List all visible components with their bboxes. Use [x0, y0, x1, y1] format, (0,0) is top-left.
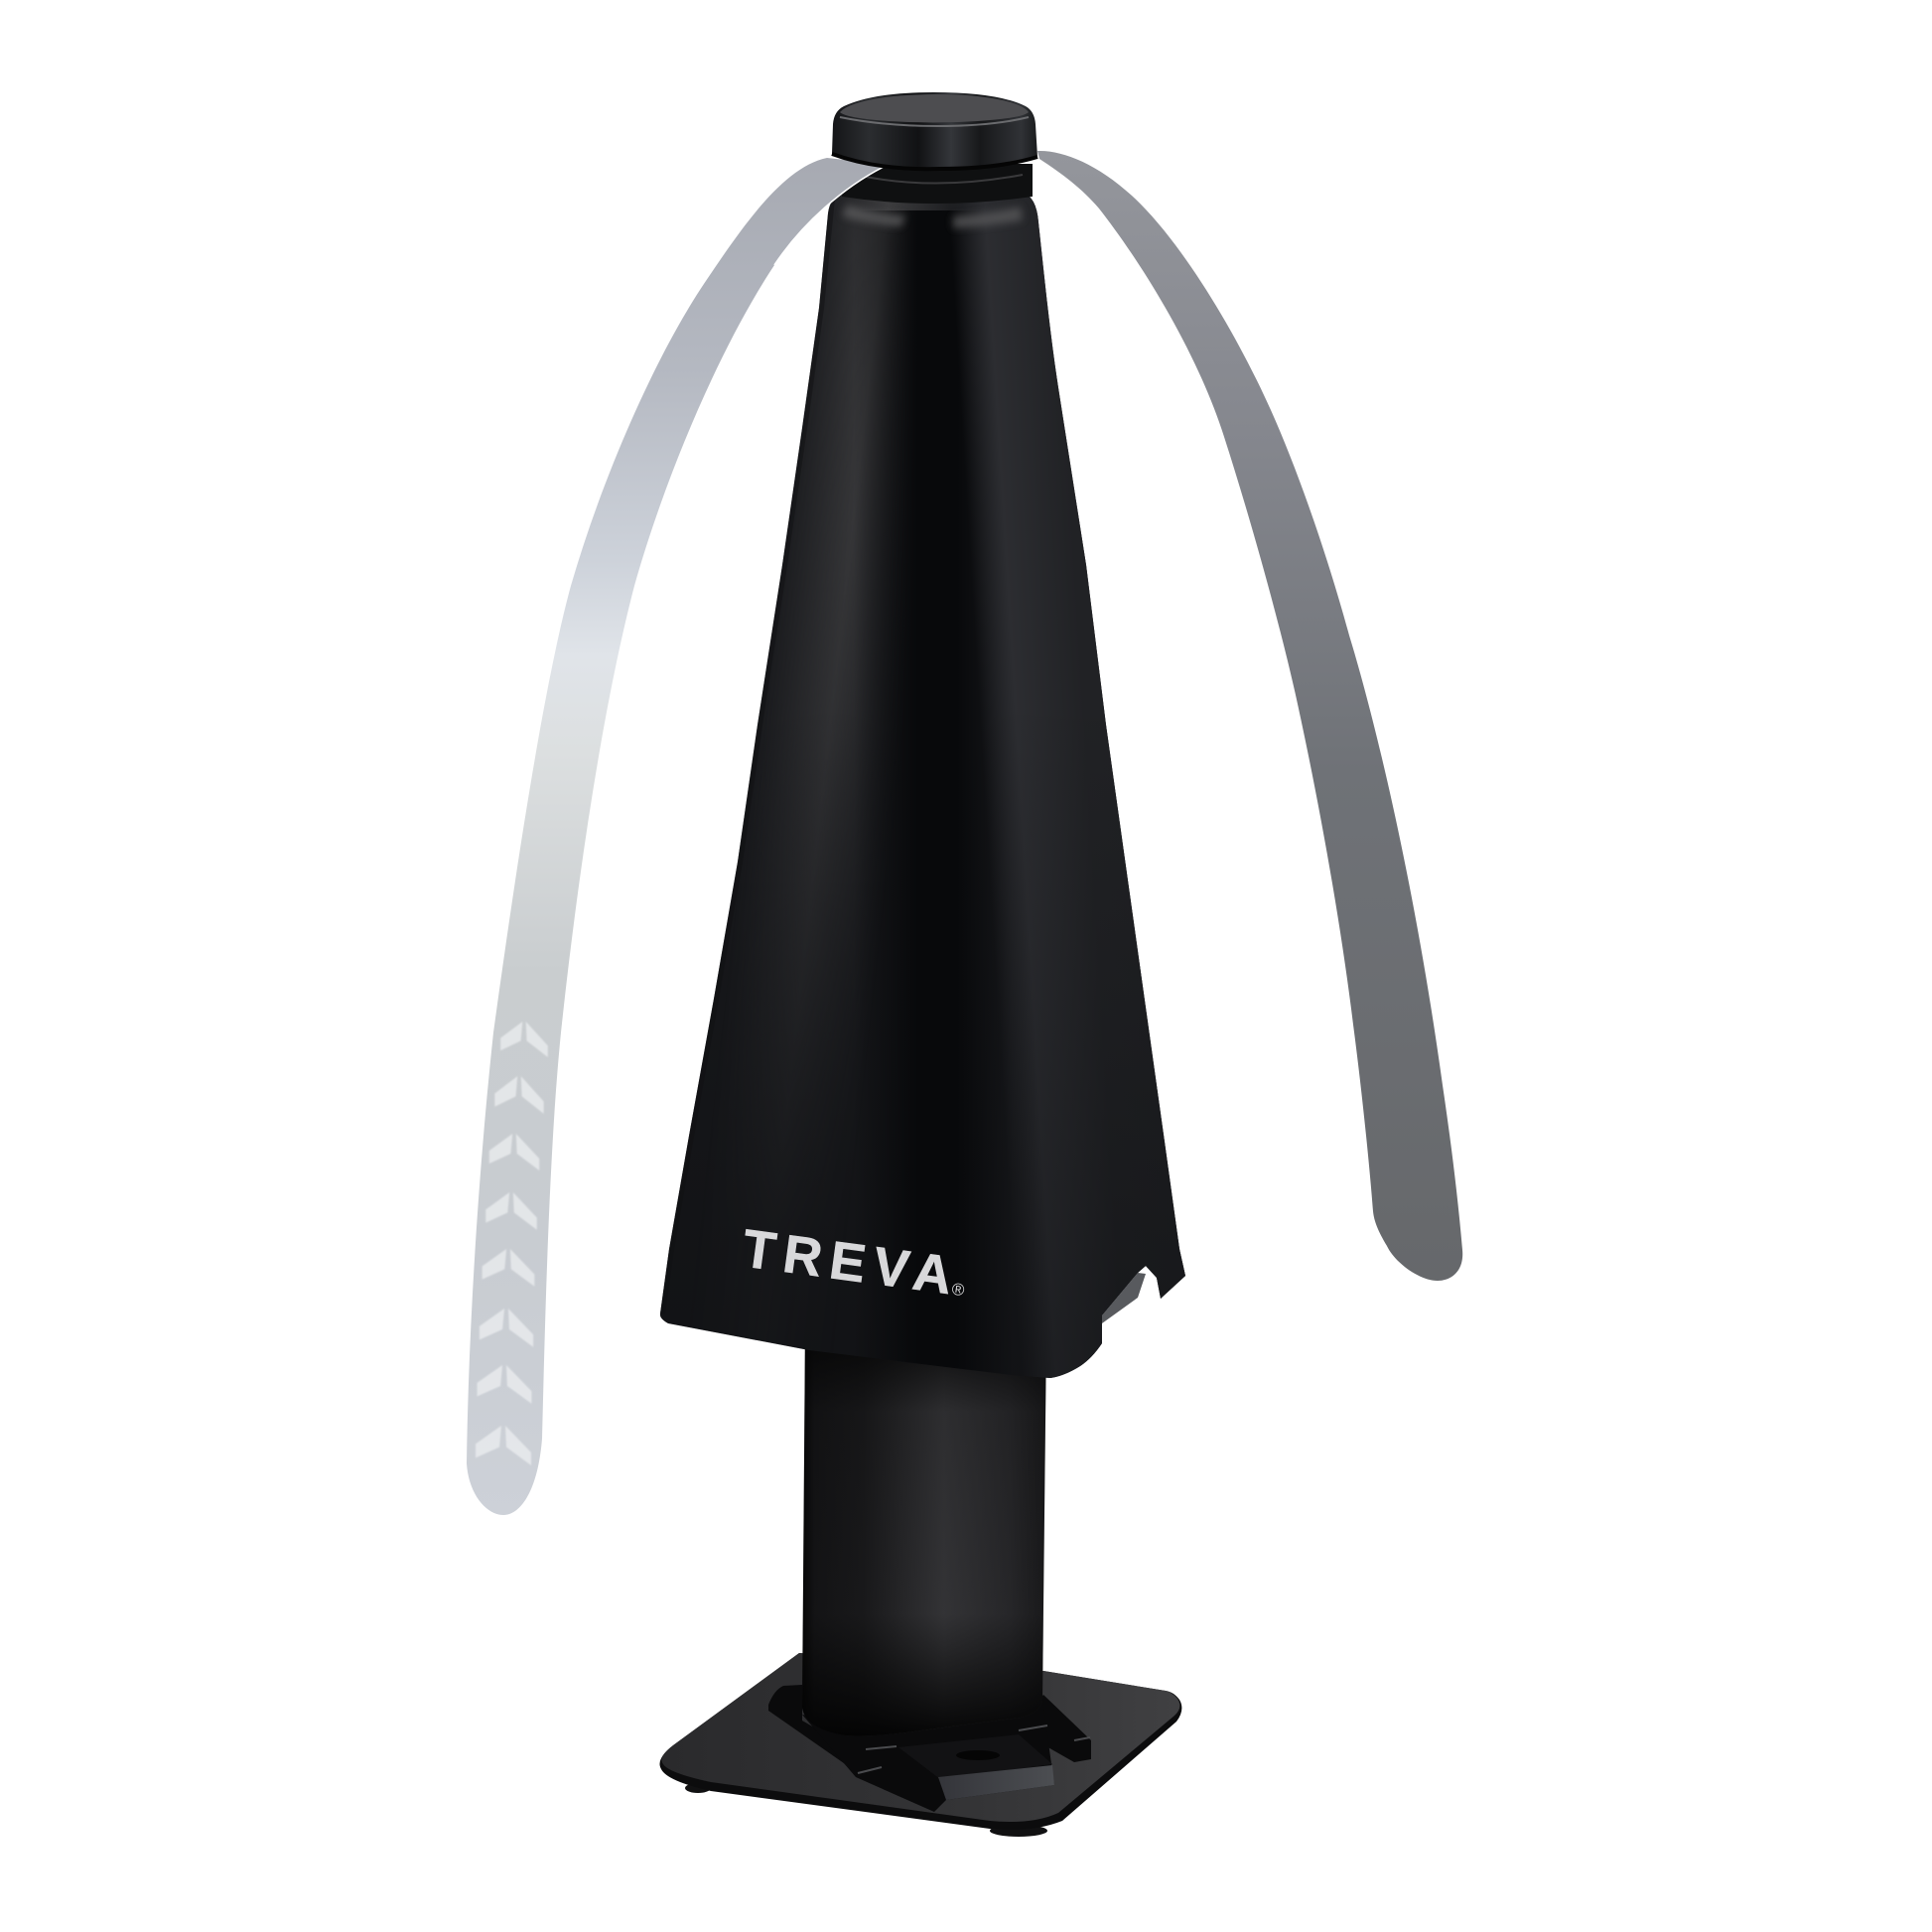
right facet [957, 197, 1185, 1378]
vent notch [1102, 1273, 1146, 1323]
mounting plate centre [802, 1700, 1054, 1812]
icon: embossed chevrons [476, 1022, 548, 1465]
base plate edge [659, 1653, 1181, 1830]
cap rim highlight [840, 117, 1029, 126]
central dark band [865, 210, 987, 1370]
right blade (dark grey) [1037, 151, 1462, 1281]
brand logo: TREVA: ® [951, 1280, 966, 1300]
top cap [832, 92, 1037, 169]
clip tongue top [898, 1734, 1052, 1779]
base assembly [659, 1653, 1181, 1837]
cap top face [840, 94, 1029, 123]
left blade (silver) [467, 158, 886, 1515]
cone body [659, 195, 1185, 1378]
lower shade [659, 963, 1185, 1378]
collar under cap [842, 164, 1033, 204]
clip recess mark [956, 1750, 1000, 1760]
brand logo: TREVA: TREVA [739, 1218, 956, 1306]
icon: rubber feet [685, 1783, 1047, 1837]
cap side [832, 92, 1037, 169]
mounting plate left rail [768, 1685, 883, 1777]
collar rim [866, 175, 1023, 184]
pole [802, 1330, 1046, 1735]
shoulder highlights [842, 205, 905, 226]
blade inner edge highlight [774, 166, 886, 265]
base plate top surface [661, 1653, 1179, 1822]
slot highlights [858, 1725, 1090, 1773]
mounting plate right rail [1017, 1695, 1091, 1762]
left rim [660, 199, 830, 1313]
cap lower seam [832, 154, 1037, 169]
clip tongue front [938, 1765, 1054, 1800]
product illustration: TREVA table fan [467, 92, 1463, 1837]
left lit band [772, 195, 945, 1090]
